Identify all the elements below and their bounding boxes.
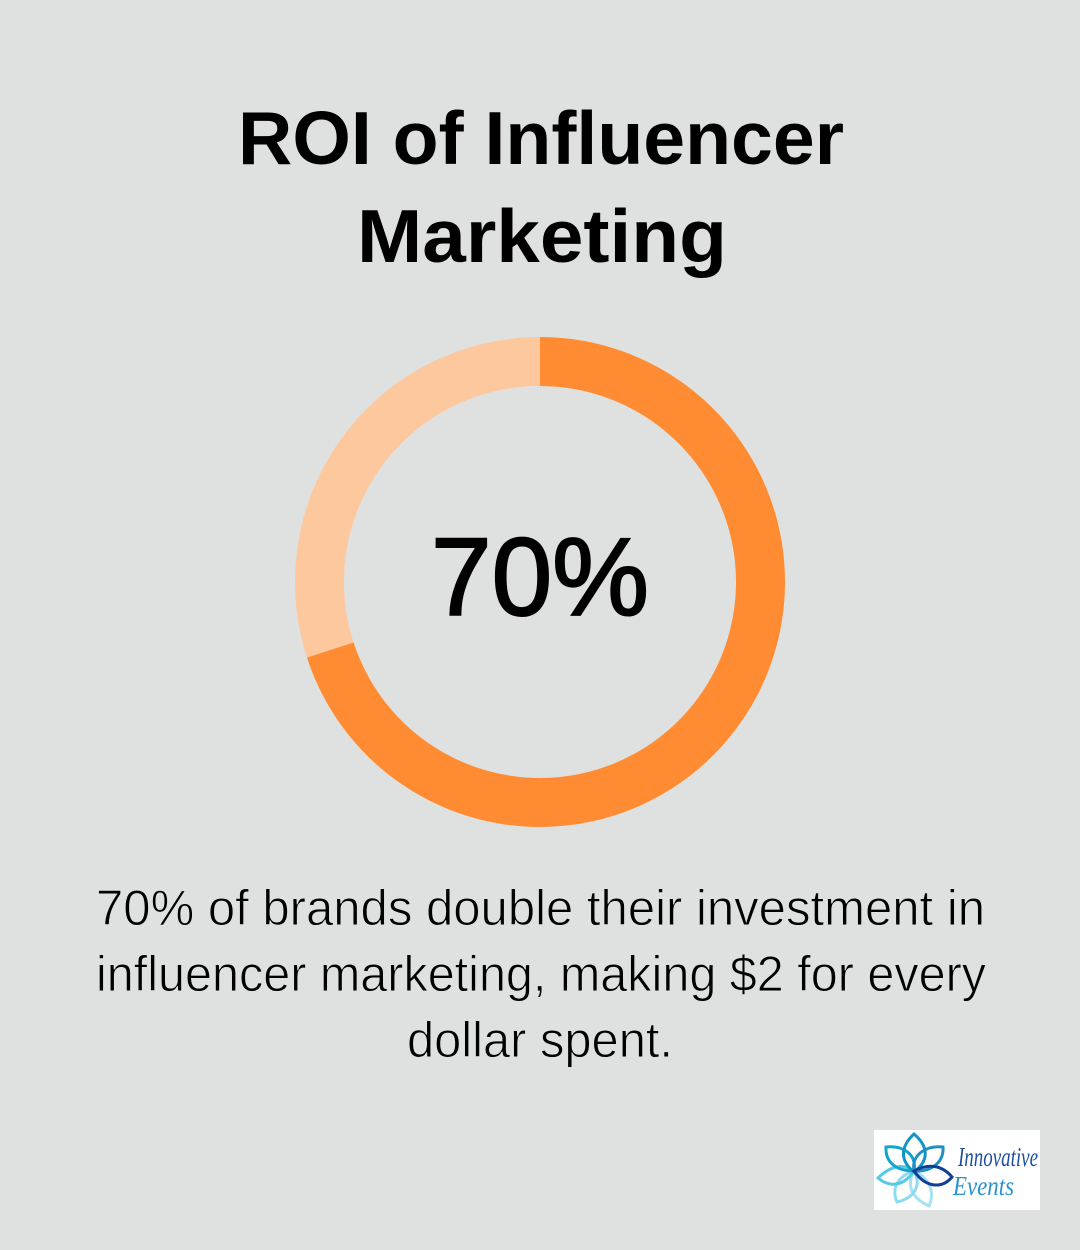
icon: flower xyxy=(878,1134,952,1206)
description text: 70% of brands double their investment in xyxy=(96,880,985,936)
title: Marketing xyxy=(357,194,727,278)
center value: 70% xyxy=(431,516,649,639)
logo text: Innovative xyxy=(957,1142,1038,1172)
logo: Innovative Events xyxy=(874,1130,1040,1210)
logo: Innovative Events: Events xyxy=(952,1171,1014,1201)
donut chart: 70% xyxy=(320,362,761,802)
description text: dollar spent. xyxy=(407,1012,673,1068)
description text xyxy=(96,880,986,1068)
description text: influencer marketing, making $2 for every xyxy=(96,946,986,1002)
title: ROI of Influencer xyxy=(238,96,844,180)
title xyxy=(238,96,844,278)
